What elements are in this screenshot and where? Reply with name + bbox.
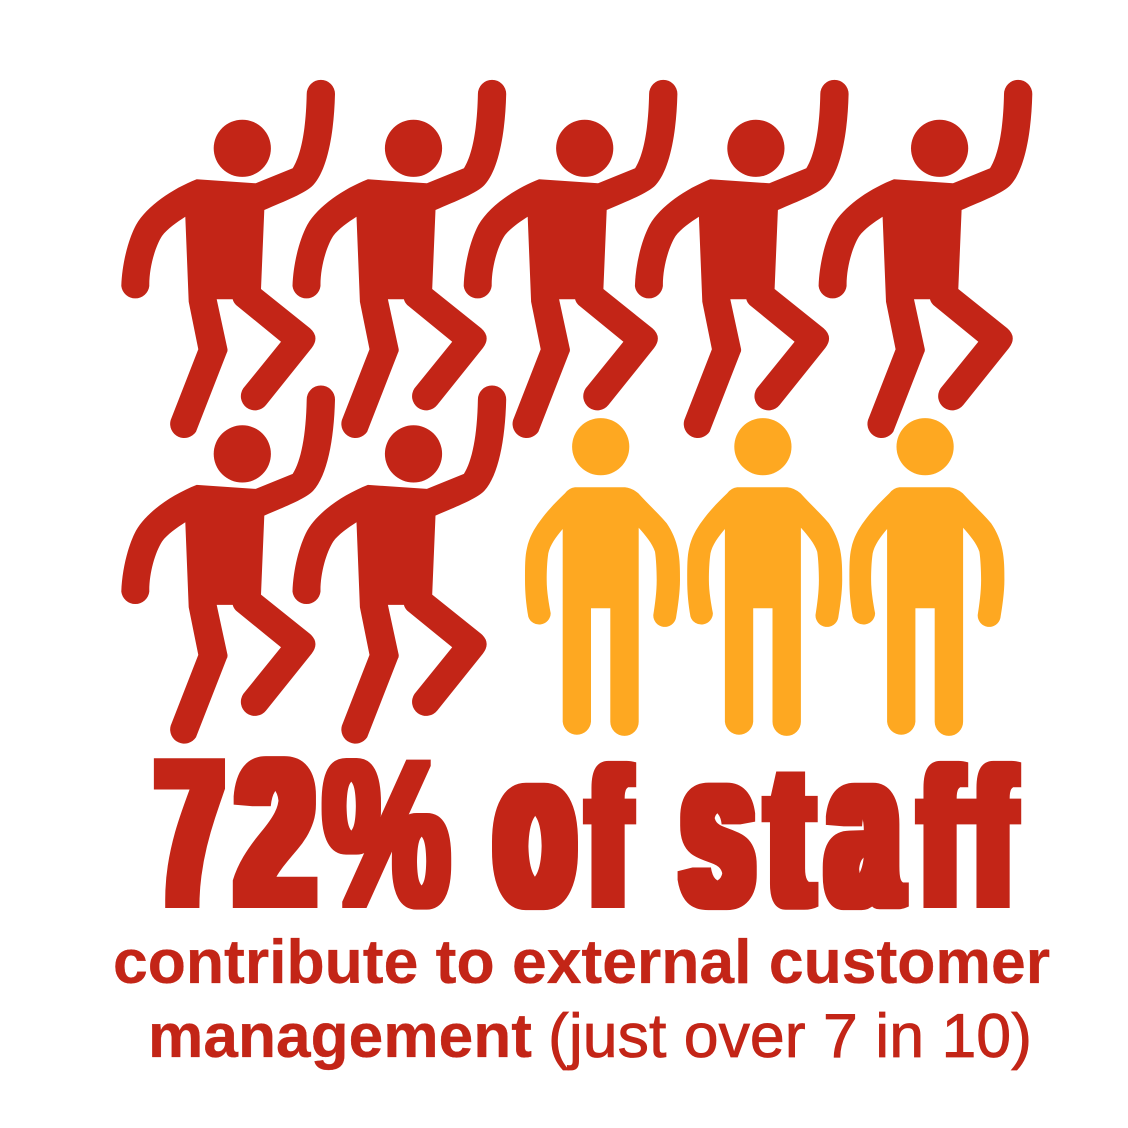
headline [158,708,1013,951]
icon: standing person 2 [687,418,842,736]
headline: % [323,718,450,949]
headline: t [769,726,811,946]
headline: a [828,708,900,951]
standing figures [525,418,1004,736]
headline: f [922,730,960,945]
headline: 2 [237,718,314,948]
subheading line 1: contribute to external customer [113,928,1050,997]
icon: jumping person 7 [292,385,506,744]
jumping figures: row 1 [121,80,1032,438]
headline: f [590,730,628,945]
headline: f [975,730,1013,945]
icon: standing person 1 [525,418,680,736]
icon: jumping person 2 [292,80,506,438]
jumping figures: row 2 [121,385,506,744]
subheading line 2: management [148,1002,532,1071]
subheading line 2 [148,1002,1032,1071]
icon: jumping person 5 [819,80,1032,438]
icon: jumping person 1 [121,80,335,438]
icon: jumping person 3 [464,80,677,438]
icon: standing person 3 [849,418,1004,736]
headline: o [496,708,574,951]
headline: s [682,708,753,951]
icon: jumping person 6 [121,385,335,744]
icon: jumping person 4 [635,80,849,438]
subheading line 2: (just over 7 in 10) [548,1002,1032,1071]
headline: 7 [158,718,221,948]
